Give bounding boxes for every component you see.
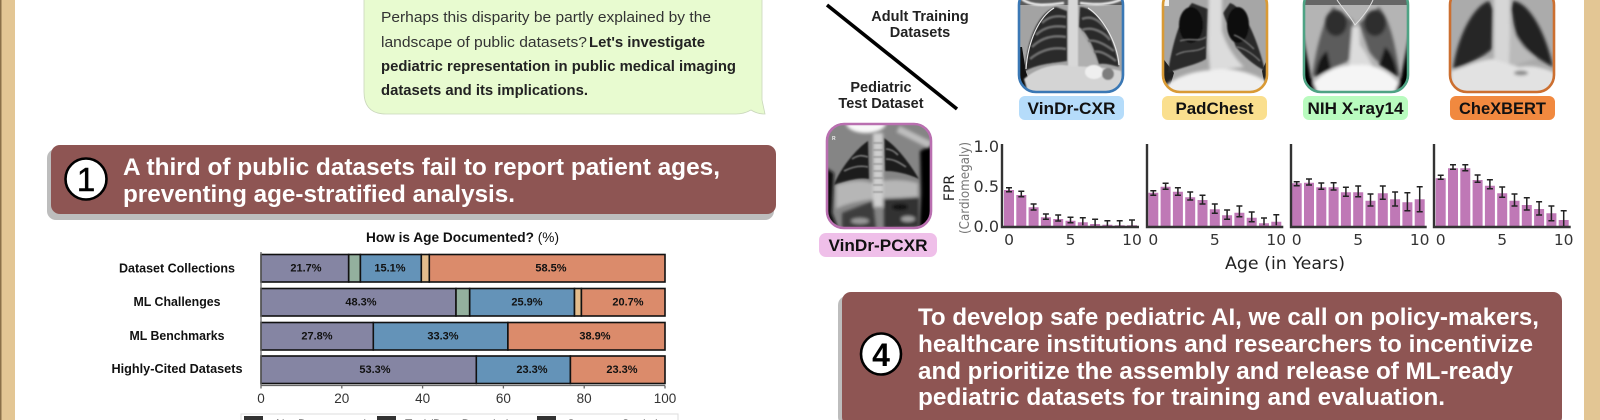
value labels: 53.3% (359, 364, 391, 376)
chat bubble callout (364, 0, 765, 114)
panel: finding 4 banner: and prioritize the assembly and release of ML-ready (918, 358, 1514, 385)
bar chart: CheXBERT FPR by age (1434, 144, 1574, 249)
x-ray: CheXBERT (1449, 0, 1555, 93)
bar chart: NIH X-ray14 FPR by age (1291, 144, 1430, 249)
value labels: 20.7% (612, 296, 644, 308)
label: NIH X-ray14: NIH X-ray14 (1308, 99, 1404, 118)
diagonal divider with axis labels: Datasets (890, 25, 950, 41)
x axis: 60 (496, 391, 511, 406)
x-ray: NIH X-ray14 (1301, 0, 1411, 97)
label: VinDr-PCXR: VinDr-PCXR (828, 236, 928, 255)
x-ray: VinDr-PCXR (826, 113, 932, 229)
x axis: 0 (257, 391, 265, 406)
chat bubble callout: pediatric representation in public medical imaging (381, 58, 736, 75)
bar chart: CheXBERT FPR by age: 5 (1497, 231, 1507, 249)
panel: finding 4 banner: 4 (872, 337, 890, 373)
chat bubble callout: landscape of public datasets? (381, 34, 587, 51)
y axis title: FPR (942, 175, 958, 201)
y axis tick labels: 1.0 (974, 137, 999, 156)
diagonal divider with axis labels: Pediatric (850, 80, 912, 96)
row: ML challenges (261, 288, 665, 316)
chat bubble callout: datasets and its implications. (381, 82, 588, 99)
label: VinDr-CXR: VinDr-CXR (1028, 99, 1116, 118)
stacked bar chart: how age is documented (112, 230, 678, 420)
value labels (290, 262, 644, 376)
panel: finding 4 banner (838, 292, 1562, 420)
y axis tick labels: 0.5 (974, 177, 999, 196)
chart title: How is Age Documented? (%) (366, 230, 559, 245)
panel: finding 4 banner: healthcare institutions and researchers to incentivize (918, 331, 1533, 358)
x axis: 20 (334, 391, 349, 406)
diagonal divider with axis labels: Adult Training (871, 9, 969, 25)
label: CheXBERT: CheXBERT (1459, 99, 1547, 118)
chat bubble callout: Let's investigate (589, 34, 705, 51)
value labels: 15.1% (374, 262, 406, 274)
bar chart: VinDr-CXR FPR by age: 10 (1122, 231, 1142, 249)
bar chart: VinDr-CXR FPR by age (1002, 144, 1142, 249)
diagonal divider with axis labels (827, 5, 969, 112)
y axis title (942, 142, 973, 234)
bar chart: NIH X-ray14 FPR by age: 0 (1292, 231, 1302, 249)
x axis (257, 252, 676, 406)
panel: finding 1 banner (47, 145, 776, 220)
chat bubble callout: Perhaps this disparity be partly explained by the (381, 9, 711, 26)
panel: finding 1 banner: preventing age-stratified analysis. (123, 181, 515, 208)
panel: finding 1 banner: 1 (77, 161, 95, 198)
bar chart: CheXBERT FPR by age: 0 (1436, 231, 1446, 249)
bar chart: CheXBERT FPR by age: 10 (1554, 231, 1574, 249)
label: VinDr-CXR (1019, 96, 1124, 120)
bar chart: VinDr-CXR FPR by age: 0 (1004, 231, 1014, 249)
bar chart: PadChest FPR by age: 5 (1210, 231, 1220, 249)
row: highly-cited datasets (261, 356, 665, 384)
right border (1584, 0, 1600, 420)
y axis title: (Cardiomegaly) (958, 142, 973, 234)
value labels: 23.3% (516, 364, 548, 376)
legend (241, 414, 678, 420)
x axis title: Age (in Years) (1225, 254, 1345, 274)
x-ray: PadChest (1162, 0, 1268, 93)
panel: finding 4 banner: pediatric datasets for training and evaluation. (918, 384, 1445, 411)
value labels: 38.9% (579, 330, 611, 342)
row labels: ML Benchmarks (130, 329, 225, 343)
value labels: 48.3% (345, 296, 377, 308)
diagonal divider with axis labels: Test Dataset (838, 96, 924, 112)
panel: finding 1 banner: A third of public datasets fail to report patient ages, (123, 154, 720, 181)
x axis: 40 (415, 391, 430, 406)
row labels: ML Challenges (134, 295, 221, 309)
label: VinDr-PCXR (819, 233, 937, 257)
label: CheXBERT (1450, 96, 1555, 120)
label: PadChest: PadChest (1176, 99, 1254, 118)
bar chart: NIH X-ray14 FPR by age: 5 (1353, 231, 1363, 249)
x axis: 100 (654, 391, 676, 406)
value labels: 21.7% (290, 262, 322, 274)
row: dataset collections (261, 254, 665, 282)
value labels: 33.3% (427, 330, 459, 342)
bar chart: PadChest FPR by age: 0 (1148, 231, 1158, 249)
bar chart: PadChest FPR by age (1147, 144, 1286, 249)
bar chart: PadChest FPR by age: 10 (1266, 231, 1286, 249)
bar chart: VinDr-CXR FPR by age: 5 (1066, 231, 1075, 249)
x-ray: VinDr-CXR (1018, 0, 1124, 93)
value labels: 23.3% (606, 364, 638, 376)
row labels (112, 262, 243, 376)
value labels: 25.9% (511, 296, 543, 308)
x axis: 80 (577, 391, 592, 406)
panel: finding 4 banner: To develop safe pediatric AI, we call on policy-makers, (918, 304, 1539, 331)
y axis tick labels (974, 137, 999, 236)
value labels: 58.5% (535, 262, 567, 274)
left border (0, 0, 15, 420)
row labels: Highly-Cited Datasets (112, 362, 243, 376)
value labels: 27.8% (301, 330, 333, 342)
row labels: Dataset Collections (119, 262, 235, 276)
label: PadChest (1162, 96, 1267, 120)
x-ray: VinDr-PCXR: R (832, 136, 836, 142)
row: ML benchmarks (261, 322, 665, 350)
bar chart: NIH X-ray14 FPR by age: 10 (1410, 231, 1430, 249)
y axis tick labels: 0.0 (974, 217, 999, 236)
